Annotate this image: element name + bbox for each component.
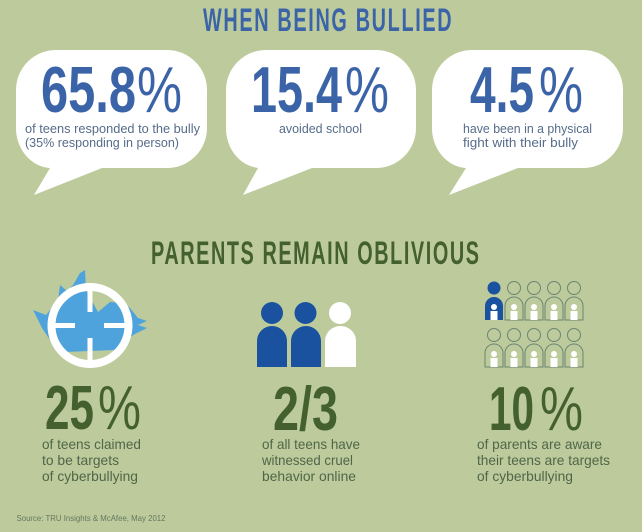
text: witnessed cruel behavior: witnessed cruel bbox=[261, 452, 353, 468]
children bbox=[490, 304, 578, 367]
stat: 10%: % bbox=[540, 375, 583, 444]
panel: speech bubble 4.5%: 4.5 bbox=[470, 53, 534, 126]
panel: speech bubble 65.8%: of teens responded to the bully bbox=[25, 122, 201, 136]
text: parents aware: of parents are aware bbox=[477, 436, 602, 452]
panel: speech bubble 4.5%: % bbox=[539, 53, 583, 126]
icon: ten parents with children bbox=[485, 282, 583, 367]
panel: speech bubble 65.8%: % bbox=[137, 53, 182, 126]
panel: speech bubble 65.8% bbox=[16, 50, 207, 195]
text: cyberbullying targets: of teens claimed bbox=[42, 436, 141, 452]
panel: speech bubble 15.4%: 15.4 bbox=[251, 53, 342, 126]
source: Source: TRU Insights & McAfee, May 2012 bbox=[16, 513, 166, 523]
panel: speech bubble 4.5%: fight with their bully bbox=[463, 136, 579, 150]
text: parents aware bbox=[477, 436, 610, 484]
icon: twitter bird in crosshair bbox=[33, 270, 147, 364]
highlighted parent bbox=[485, 282, 503, 320]
heading: parents remain oblivious: PARENTS REMAIN OBLIVIOUS bbox=[151, 235, 479, 271]
stat: 2/3: 2/3 bbox=[273, 375, 338, 444]
text: cyberbullying targets bbox=[42, 436, 141, 484]
outlined parents bbox=[485, 282, 583, 367]
panel: speech bubble 4.5% bbox=[432, 50, 623, 195]
text: witnessed cruel behavior: of all teens have bbox=[262, 436, 360, 452]
panel: speech bubble 4.5%: have been in a physical bbox=[463, 122, 592, 136]
panel: speech bubble 15.4%: % bbox=[345, 53, 389, 126]
icon: three people bbox=[257, 302, 356, 367]
text: parents aware: their teens are targets bbox=[477, 452, 610, 468]
panel: speech bubble 15.4% bbox=[226, 50, 416, 195]
stat: 25%: % bbox=[98, 374, 141, 443]
text: witnessed cruel behavior bbox=[261, 436, 360, 484]
text: cyberbullying targets: of cyberbullying bbox=[42, 468, 138, 484]
stat: 10%: 10 bbox=[489, 375, 534, 444]
title: when being bullied: WHEN BEING BULLIED bbox=[203, 2, 452, 38]
panel: speech bubble 15.4%: avoided school bbox=[279, 122, 362, 136]
text: parents aware: of cyberbullying bbox=[477, 468, 573, 484]
panel: speech bubble 65.8%: (35% responding in person) bbox=[25, 136, 179, 150]
stat: 25%: 25 bbox=[45, 374, 94, 443]
panel: speech bubble 65.8%: 65.8 bbox=[41, 53, 136, 126]
text: cyberbullying targets: to be targets bbox=[42, 452, 119, 468]
text: witnessed cruel behavior: behavior online bbox=[262, 468, 356, 484]
